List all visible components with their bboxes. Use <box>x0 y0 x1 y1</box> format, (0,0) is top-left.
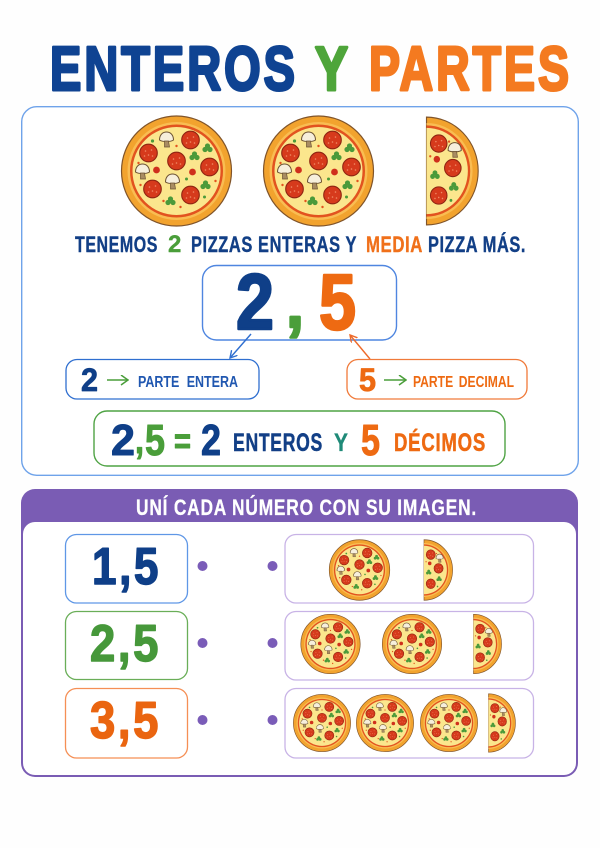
image card 1.5 pizzas <box>285 534 534 603</box>
equation box: 5 <box>361 416 380 465</box>
equation box: ENTEROS <box>233 429 323 457</box>
panel body <box>23 522 576 775</box>
label: parte entera <box>66 360 259 399</box>
title <box>50 35 572 104</box>
label: parte entera: 2 <box>81 362 98 398</box>
title: Y <box>315 35 348 104</box>
sentence: PIZZAS ENTERAS Y <box>191 232 357 257</box>
number card 3,5 <box>66 688 188 758</box>
sentence: PIZZA MÁS. <box>428 232 526 257</box>
label: parte decimal: 5 <box>359 362 376 398</box>
equation box: Y <box>334 429 348 457</box>
panel: pizzas and decimal explanation <box>22 107 578 475</box>
title: ENTEROS <box>50 35 298 104</box>
icon: whole pizza 2 <box>264 116 374 226</box>
equation box: 2 <box>201 416 221 465</box>
panel frame <box>22 107 578 475</box>
number card 1,5 <box>66 534 188 603</box>
equation box: DÉCIMOS <box>394 428 486 457</box>
number card 2,5 <box>66 612 188 680</box>
image card 3.5 pizzas <box>285 688 534 758</box>
panel: matching exercise <box>21 489 578 777</box>
number card 1,5: 1,5 <box>92 538 161 596</box>
arrow: to decimal part <box>350 335 370 359</box>
label: parte decimal: PARTE DECIMAL <box>413 374 514 391</box>
big number box <box>202 257 396 346</box>
label: parte entera: PARTE ENTERA <box>138 374 238 391</box>
icon: half pizza <box>426 117 478 225</box>
connection dots <box>198 561 278 725</box>
sentence: MEDIA <box>366 232 423 257</box>
big number box: , <box>286 266 304 342</box>
equation box: 5 <box>145 416 165 465</box>
image card 2.5 pizzas <box>285 612 534 680</box>
arrow: to whole part <box>230 334 251 358</box>
number card 2,5: 2,5 <box>90 615 161 673</box>
equation box: 2 <box>111 416 135 465</box>
equation box <box>94 411 505 466</box>
big number box: 5 <box>319 257 356 346</box>
number card 3,5: 3,5 <box>90 692 161 750</box>
header text: UNÍ CADA NÚMERO CON SU IMAGEN. <box>136 495 477 520</box>
sentence: TENEMOS <box>75 232 158 257</box>
big number box: 2 <box>236 257 274 346</box>
icon: whole pizza 1 <box>122 116 232 226</box>
equation box: = <box>174 420 191 461</box>
label: parte decimal <box>347 360 527 399</box>
sentence: 2 <box>168 231 182 258</box>
equation box: , <box>135 420 144 462</box>
panel header <box>21 489 578 777</box>
